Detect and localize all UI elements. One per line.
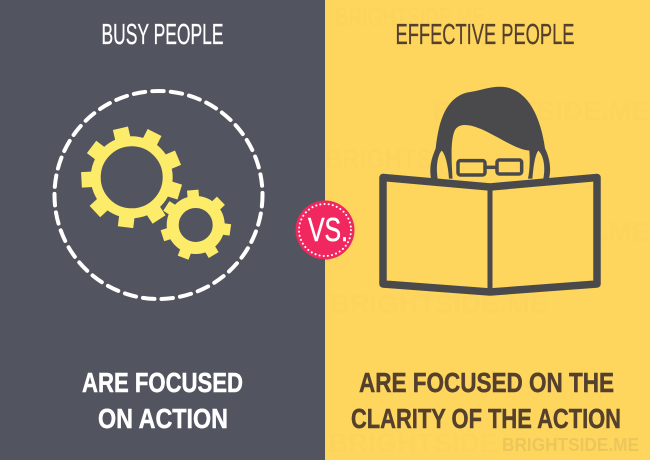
watermarks: faint site name: BRIGHTSIDE.ME bbox=[330, 289, 548, 319]
panel: busy people background bbox=[0, 0, 325, 460]
icon: small gear bbox=[161, 190, 231, 260]
icon: book spine bbox=[488, 186, 492, 292]
icon: person reading a book bbox=[383, 87, 597, 292]
icon: open book bbox=[383, 178, 597, 292]
watermark: brightside.me: BRIGHTSIDE.ME bbox=[502, 435, 639, 455]
watermarks: faint site name: BRIGHTSIDE.ME bbox=[325, 144, 515, 174]
watermarks: faint site name bbox=[325, 2, 650, 458]
icon: head and hair bbox=[430, 87, 550, 180]
caption: busy people: ARE FOCUSED bbox=[82, 367, 243, 398]
icon: large gear bbox=[81, 127, 182, 228]
heading: busy people: BUSY PEOPLE bbox=[102, 19, 224, 51]
watermarks: faint site name: BRIGHTSIDE.ME bbox=[335, 2, 485, 32]
watermarks: faint site name: BRIGHTSIDE bbox=[328, 428, 498, 458]
icon: glasses bbox=[458, 160, 522, 175]
caption: effective people bbox=[351, 367, 621, 434]
icon: gears bbox=[81, 127, 231, 260]
watermarks: faint site name: BRIGHTSIDE.ME bbox=[432, 96, 650, 126]
caption: busy people: ON ACTION bbox=[98, 403, 228, 434]
icon: dashed circle bbox=[54, 91, 262, 299]
caption: busy people bbox=[82, 367, 243, 434]
badge: vs bbox=[296, 200, 354, 260]
panel: effective people background bbox=[325, 0, 650, 460]
badge: vs: VS. bbox=[308, 211, 348, 248]
watermarks: faint site name: BRIGHTSIDE.ME bbox=[432, 217, 650, 247]
